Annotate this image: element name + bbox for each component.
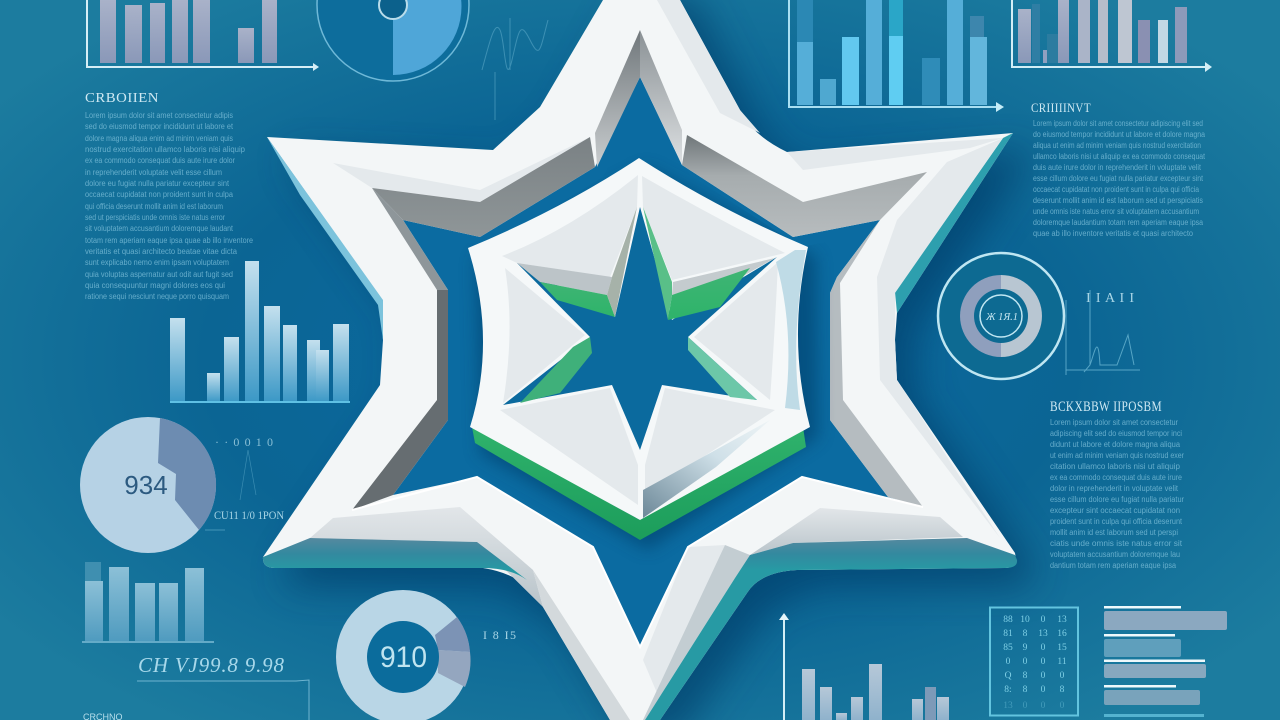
text block: left column: in reprehenderit voluptate velit esse cillum xyxy=(85,168,222,177)
data table: 10 xyxy=(1020,615,1030,625)
text block: right lower: excepteur sint occaecat cupidatat non xyxy=(1050,506,1180,515)
hole of the outer star xyxy=(393,77,923,647)
text block: right column: doloremque laudantium totam rem aperiam eaque ipsa xyxy=(1033,218,1203,227)
inset face: upper centre right xyxy=(643,207,672,320)
data table: 8 xyxy=(1023,629,1028,639)
text block: right column: duis aute irure dolor in reprehenderit in voluptate velit xyxy=(1033,163,1202,172)
grey lower edge: left arm leg xyxy=(533,570,630,720)
bar chart: left middle xyxy=(170,261,350,402)
data table: 81 xyxy=(1003,629,1013,639)
text block: right lower: proident sunt in culpa qui officia deserunt xyxy=(1050,517,1183,526)
data table: 0 xyxy=(1041,701,1046,711)
text block: left column: ex ea commodo consequat duis aute irure dolor xyxy=(85,156,235,165)
thin grey edge: left xyxy=(372,188,448,290)
grey inner face: upper left xyxy=(372,137,595,237)
inset face: upper left green xyxy=(540,282,615,317)
text block: left column: qui officia deserunt mollit anim id est laborum xyxy=(85,202,223,211)
centre star cut-out xyxy=(503,207,777,450)
inset face: left xyxy=(520,337,592,403)
text block: right lower: mollit anim id est laborum sed ut perspi xyxy=(1050,528,1178,537)
text block: left column: veritatis et quasi architecto beatae vitae dicta xyxy=(85,247,238,256)
hexagon white body xyxy=(468,158,810,520)
caption: lower left xyxy=(137,653,309,720)
text block: right lower: esse cillum dolore eu fugiat nulla pariatur xyxy=(1050,495,1184,504)
teal underside: left arm xyxy=(263,538,527,580)
hexagon green side xyxy=(472,427,806,540)
data table: 8 xyxy=(1060,685,1065,695)
data table: 15 xyxy=(1057,643,1067,653)
pie chart with value xyxy=(80,417,216,553)
hexagon lower sliver xyxy=(643,420,770,518)
bar chart: top right grey xyxy=(1012,0,1212,72)
bar chart: top left xyxy=(87,0,319,71)
donut chart: bottom xyxy=(336,590,471,720)
data table: 13 xyxy=(1038,629,1048,639)
grey lower edge: right arm leg xyxy=(643,545,750,720)
grey lower facet: left arm xyxy=(310,507,543,607)
peak line chart: right xyxy=(1066,290,1140,375)
grey inner face: left xyxy=(352,290,448,510)
pie chart with value: 934 xyxy=(124,470,168,500)
text block: left column xyxy=(85,111,253,301)
caption: lower left: CH VJ99.8 9.98 xyxy=(138,653,284,677)
text block: right lower: dantium totam rem aperiam eaque ipsa xyxy=(1050,561,1176,570)
heading: right lower: BCKXBBW IIPOSBM xyxy=(1050,399,1162,415)
text block: right lower xyxy=(1050,418,1184,570)
text block: right lower: adipiscing elit sed do eiusmod tempor inci xyxy=(1050,429,1182,438)
pie chart labels: · · 0 0 1 0 xyxy=(215,435,273,449)
data table: 0 xyxy=(1023,657,1028,667)
inner hexagon star xyxy=(468,158,810,540)
inset face: upper right green xyxy=(668,268,750,320)
text block: right column: quae ab illo inventore veritatis et quasi architecto xyxy=(1033,229,1193,238)
data table: 0 xyxy=(1060,701,1065,711)
text block: right column: esse cillum dolore eu fugiat nulla pariatur excepteur sint xyxy=(1033,174,1204,183)
text block: left column: sit voluptatem accusantium doloremque laudant xyxy=(85,224,234,233)
donut chart: top centre-left xyxy=(317,0,469,81)
ring facets xyxy=(333,0,1003,700)
ridge highlights xyxy=(352,477,923,647)
text block: left column: quia voluptas aspernatur aut odit aut fugit sed xyxy=(85,270,233,279)
data table: 13 xyxy=(1003,701,1013,711)
ring gauge: right xyxy=(938,253,1064,379)
data table: 9 xyxy=(1023,643,1028,653)
inset face: right xyxy=(688,337,757,400)
inner hexagon shadow xyxy=(476,168,818,550)
text block: right lower: dolor in reprehenderit in voluptate velit xyxy=(1050,484,1179,493)
star shadow xyxy=(283,0,1035,720)
data table: 0 xyxy=(1060,671,1065,681)
text block: left column: occaecat cupidatat non proident sunt in culpa xyxy=(85,190,234,199)
pie chart labels xyxy=(205,435,284,530)
text block: right column: Lorem ipsum dolor sit amet consectetur adipiscing elit sed xyxy=(1033,119,1203,128)
text block: left column: sed do eiusmod tempor incididunt ut labore et xyxy=(85,122,234,131)
data table: 0 xyxy=(1041,657,1046,667)
text block: right lower: didunt ut labore et dolore magna aliqua xyxy=(1050,440,1181,449)
peak line chart: right: I I A I I xyxy=(1086,291,1134,306)
large outer star xyxy=(263,0,1017,720)
text block: left column: sed ut perspiciatis unde omnis iste natus error xyxy=(85,213,225,222)
pie chart labels: CU11 1/0 1PON xyxy=(214,508,284,522)
data table: 8 xyxy=(1023,685,1028,695)
bar chart: lower left xyxy=(82,562,214,642)
data table: 13 xyxy=(1057,615,1067,625)
data table: 0 xyxy=(1023,701,1028,711)
heading: right column: CRIIIIINVT xyxy=(1031,100,1091,115)
text block: right column: do eiusmod tempor incididunt ut labore et dolore magna xyxy=(1033,130,1205,139)
text block: right lower: ciatis unde omnis iste natus error sit xyxy=(1050,539,1183,548)
horizontal bar list xyxy=(1104,606,1227,717)
ring gauge: right: Ж 1Я.1 xyxy=(985,311,1018,323)
text block: left column: nostrud exercitation ullamco laboris nisi aliquip xyxy=(85,145,246,154)
text block: left column: totam rem aperiam eaque ipsa quae ab illo inventore xyxy=(85,236,253,245)
text block: right lower: ex ea commodo consequat duis aute irure xyxy=(1050,473,1182,482)
apex grey faces xyxy=(595,30,682,167)
data table: 88 xyxy=(1003,615,1013,625)
data table: 11 xyxy=(1057,657,1067,667)
data table: 0 xyxy=(1041,615,1046,625)
hexagon right sliver xyxy=(776,250,806,410)
bar chart: top right blue xyxy=(789,0,1004,112)
data table: 8 xyxy=(1023,671,1028,681)
teal underside: right arm xyxy=(645,538,1017,720)
text block: left column: quia consequuntur magni dolores eos qui xyxy=(85,281,225,290)
sketch line chart: top centre-left xyxy=(482,18,548,120)
star edge highlights xyxy=(267,133,1013,340)
inset face: upper centre left xyxy=(607,207,637,317)
text block: right lower: ut enim ad minim veniam quis nostrud exer xyxy=(1050,451,1184,460)
text block: left column: ratione sequi nesciunt neque porro quisquam xyxy=(85,292,229,301)
text block: right lower: Lorem ipsum dolor sit amet consectetur xyxy=(1050,418,1178,427)
text block: right column: aliqua ut enim ad minim veniam quis nostrud exercitation xyxy=(1033,141,1201,150)
text block: right column: unde omnis iste natus error sit voluptatem accusantium xyxy=(1033,207,1199,216)
text block: right column: occaecat cupidatat non proident sunt in culpa qui officia xyxy=(1033,185,1199,194)
data table: 0 xyxy=(1041,671,1046,681)
data table: 8: xyxy=(1004,685,1012,695)
text block: right column: deserunt mollit anim id est laborum sed ut perspiciatis xyxy=(1033,196,1203,205)
data table: 0 xyxy=(1006,657,1011,667)
data table xyxy=(990,608,1078,716)
text block: right column: ullamco laboris nisi ut aliquip ex ea commodo consequat xyxy=(1033,152,1206,161)
data table: 0 xyxy=(1041,643,1046,653)
data table: Q xyxy=(1005,671,1012,681)
data table: 85 xyxy=(1003,643,1013,653)
bar chart: bottom centre-right xyxy=(779,613,949,720)
grey inner face: upper right xyxy=(682,135,927,237)
grey inner face: right xyxy=(830,220,923,507)
text block: left column: sunt explicabo nemo enim ipsam voluptatem xyxy=(85,258,229,267)
text block: right lower: citation ullamco laboris nisi ut aliquip xyxy=(1050,462,1181,471)
hexagon facets xyxy=(500,175,785,505)
data table: 16 xyxy=(1057,629,1067,639)
data table: 0 xyxy=(1041,685,1046,695)
inset face: upper left grey xyxy=(517,263,612,295)
donut label: I 8 I5 xyxy=(483,628,516,642)
text block: right column xyxy=(1033,119,1206,238)
text block: left column: dolore magna aliqua enim ad minim veniam quis xyxy=(85,134,233,143)
text block: right lower: voluptatem accusantium doloremque lau xyxy=(1050,550,1180,559)
grey lower facet: right arm xyxy=(750,508,963,555)
donut chart: bottom: 910 xyxy=(380,641,427,674)
text block: left column: Lorem ipsum dolor sit amet consectetur adipis xyxy=(85,111,233,120)
text block: left column: dolore eu fugiat nulla pariatur excepteur sint xyxy=(85,179,230,188)
heading: left column: CRBOIIEN xyxy=(85,91,159,106)
inset face: upper right grey xyxy=(672,258,775,295)
outer star body xyxy=(263,0,1016,720)
